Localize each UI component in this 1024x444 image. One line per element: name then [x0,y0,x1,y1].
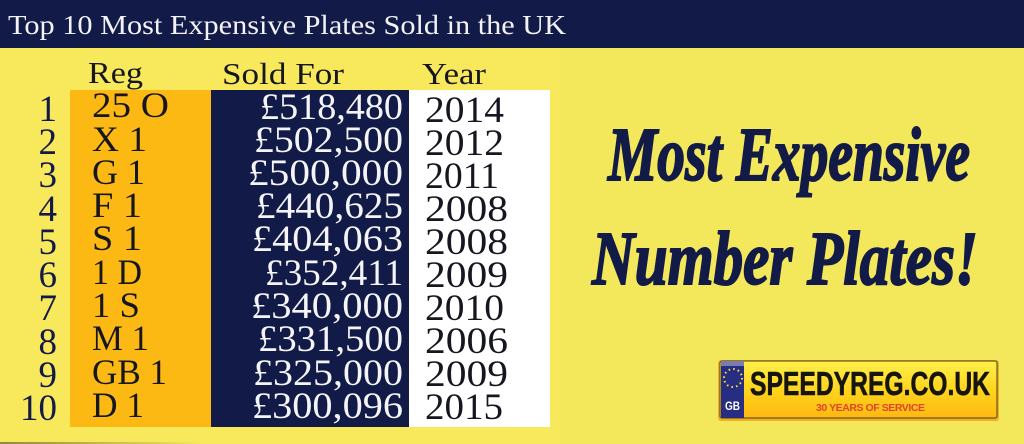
column: sold for: £500,000 [248,153,403,194]
column: year: 2009 [425,354,508,395]
column: sold for: £300,096 [252,386,403,427]
column: registration: X 1 [92,119,147,159]
column: year: 2008 [425,222,508,263]
rank numbers: 10 [20,388,57,429]
column: year: 2006 [425,321,508,362]
column: year: 2014 [425,90,504,131]
column: registration: F 1 [92,185,142,225]
column: registration: G 1 [92,152,145,192]
column: sold for: £352,411 [265,253,403,294]
table column headings [88,55,487,91]
plate: blue GB strip: GB [725,399,740,413]
rank numbers: 4 [38,189,57,230]
column: sold for: £331,500 [258,319,403,360]
column: year: 2015 [425,387,503,428]
column: registration: M 1 [92,318,149,358]
column: year: 2009 [425,255,508,296]
table column headings: Year [422,56,487,91]
rank numbers: 9 [38,355,57,396]
logo: speedyreg number plate [718,360,999,421]
column: sold for: £340,000 [251,286,403,327]
rank numbers [20,89,57,429]
column: sold for [211,87,409,427]
rank numbers: 3 [38,155,57,196]
table column headings: Sold For [222,56,345,91]
column: registration: 1 D [92,252,142,292]
rank numbers: 7 [38,288,57,329]
column: sold for: £518,480 [260,87,403,128]
column: year: 2012 [425,123,504,164]
column: year: 2010 [425,288,504,329]
rank numbers: 1 [38,89,57,130]
title bar: Top 10 Most Expensive Plates Sold in the UK [8,10,567,40]
column: sold for: £404,063 [252,219,403,260]
rank numbers: 5 [38,222,57,263]
plate: blue GB strip [721,361,744,418]
column: sold for: £440,625 [256,186,403,227]
column: registration [70,85,211,427]
column: registration: GB 1 [92,352,167,392]
rank numbers: 8 [38,322,57,363]
column: sold for: £502,500 [254,120,403,161]
column: year: 2011 [425,156,499,197]
column: year [409,90,550,428]
rank numbers: 6 [38,255,57,296]
column: year: 2008 [425,189,508,230]
column: registration: 1 S [92,285,140,325]
rank numbers: 2 [38,122,57,163]
title bar [0,0,1024,48]
plate: tagline: 30 YEARS OF SERVICE [816,402,925,414]
column: registration: 25 O [92,85,169,125]
heading: most expensive number plates [591,113,978,301]
column: registration: S 1 [92,218,142,258]
column: sold for: £325,000 [253,353,403,394]
table column headings: Reg [88,55,143,90]
column: registration: D 1 [92,385,144,425]
